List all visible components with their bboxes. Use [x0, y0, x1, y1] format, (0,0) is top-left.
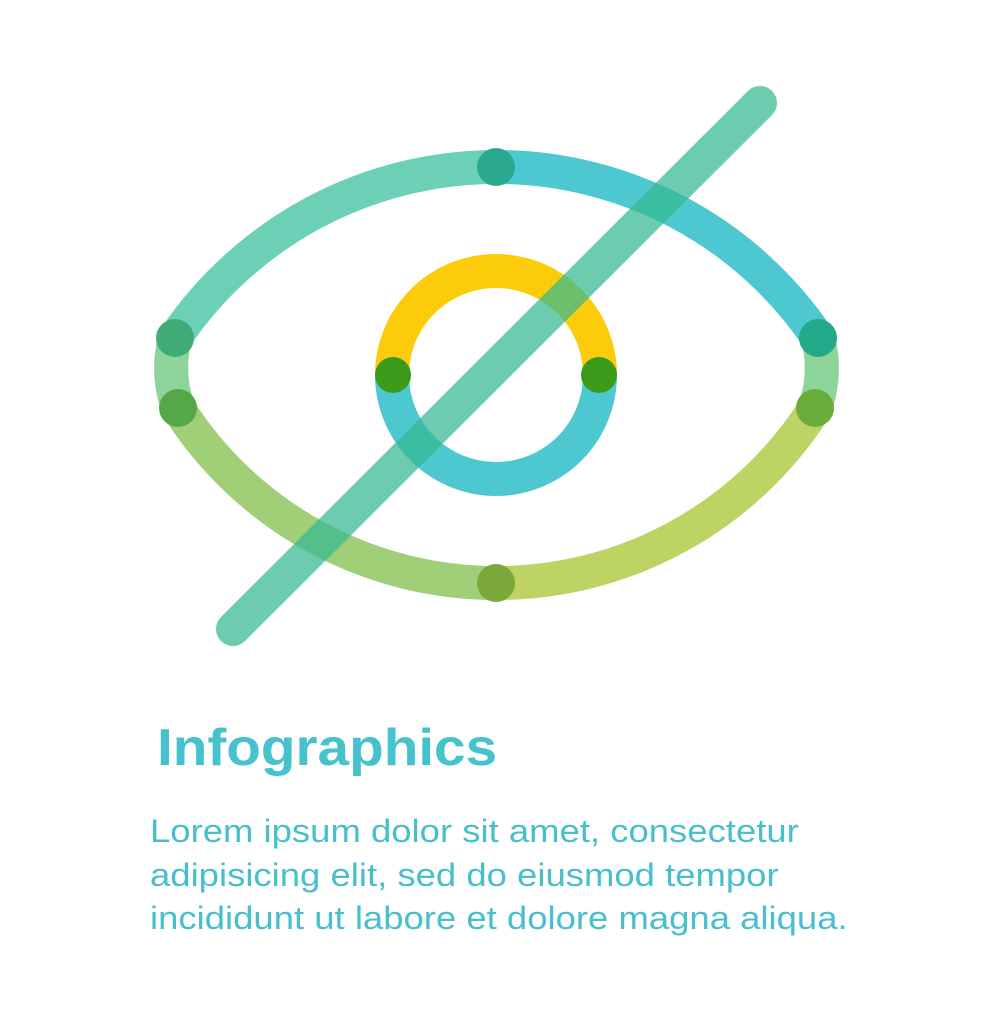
body text: adipisicing elit, sed do eiusmod tempor	[150, 856, 779, 892]
iris ring	[392, 271, 600, 479]
title: Infographics	[157, 719, 497, 777]
body text	[150, 813, 848, 936]
body text: incididunt ut labore et dolore magna aliqua.	[150, 900, 848, 936]
eye outline	[171, 167, 822, 583]
icon: crossed-out eye	[154, 86, 839, 646]
body text: Lorem ipsum dolor sit amet, consectetur	[150, 813, 799, 849]
joint dots	[156, 148, 837, 602]
slash line	[233, 103, 760, 629]
